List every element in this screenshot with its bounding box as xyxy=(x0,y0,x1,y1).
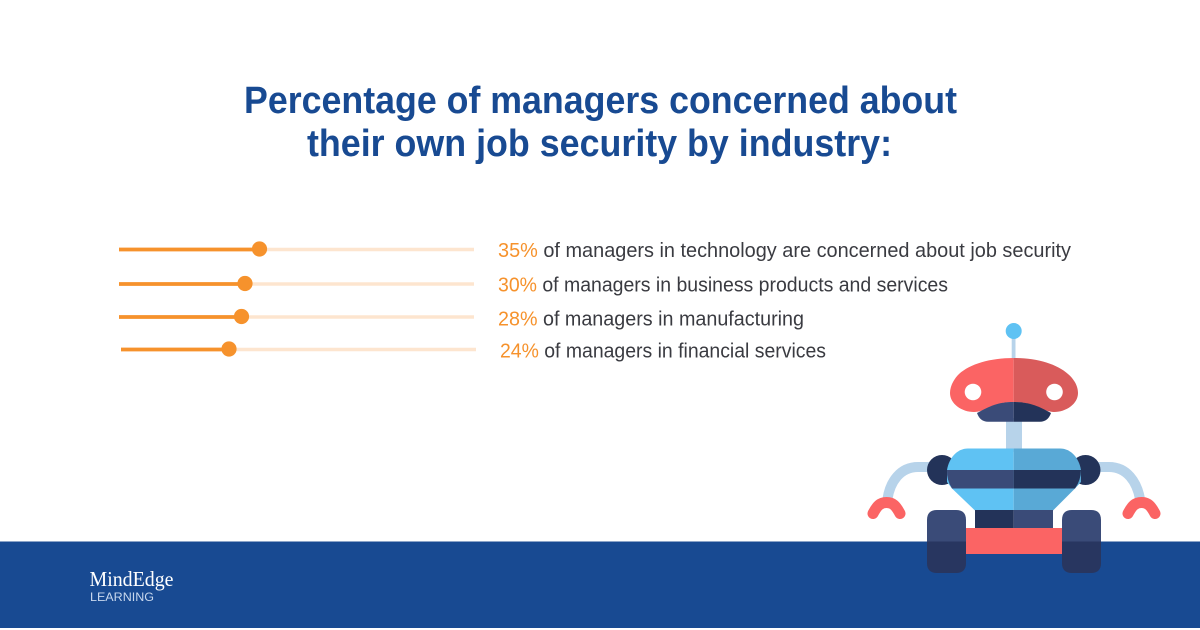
row: technology 35%: 35% of managers in technology are concerned about job security xyxy=(498,240,1071,262)
robot mouth xyxy=(977,402,1051,422)
robot base xyxy=(962,528,1066,554)
row: manufacturing 28%: 28% of managers in manufacturing xyxy=(498,308,804,330)
robot torso xyxy=(947,448,1081,510)
robot head xyxy=(950,358,1078,412)
row: business products and services 30% xyxy=(119,274,948,296)
row: business products and services 30%: 30% of managers in business products and services xyxy=(498,274,948,296)
row: manufacturing 28% xyxy=(119,308,804,330)
robot waist xyxy=(975,510,1053,530)
robot wheels xyxy=(927,510,1101,573)
row: financial services 24% xyxy=(121,340,826,362)
title xyxy=(244,80,957,165)
title: Percentage of managers concerned about xyxy=(244,80,957,122)
robot shoulders xyxy=(927,455,1100,485)
robot arms xyxy=(888,467,1140,499)
footer banner xyxy=(0,542,1200,628)
robot neck xyxy=(1006,418,1022,452)
row: technology 35% xyxy=(119,240,1071,262)
logo: MindEdge Learning: LEARNING xyxy=(90,592,154,604)
logo: MindEdge Learning xyxy=(90,567,174,604)
logo: MindEdge Learning: MindEdge xyxy=(90,567,174,591)
robot hands xyxy=(873,502,1155,514)
robot antenna xyxy=(1006,323,1022,360)
title: their own job security by industry: xyxy=(307,123,892,165)
row: financial services 24%: 24% of managers in financial services xyxy=(500,340,826,362)
icon: robot xyxy=(873,323,1155,573)
